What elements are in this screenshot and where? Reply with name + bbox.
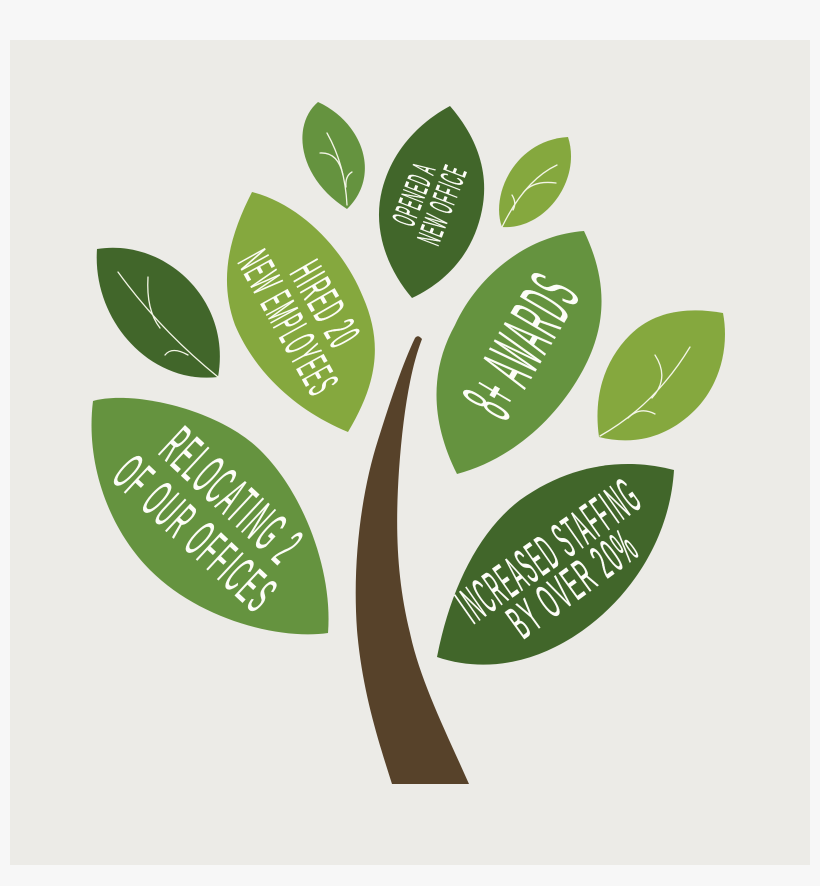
text: relocating 2 of our offices [102,416,315,624]
leaf: increased staffing by over 20% [437,464,674,665]
leaf veins [118,272,218,377]
leaf veins [320,133,352,205]
leaf veins [502,165,557,227]
leaf: opened a new office: OPENED A [385,157,442,231]
leaf: hired 20 new employees [227,192,375,432]
leaf: opened a new office: NEW OFFICE [410,160,474,250]
tree trunk [356,336,469,784]
infographic canvas: OF OUR OFFICES [102,445,288,624]
infographic canvas: RELOCATING 2 [148,416,315,577]
leaf veins [600,347,690,436]
leaf: right light green [597,310,725,440]
infographic canvas: NEW EMPLOYEES [228,242,349,404]
text: hired 20 new employees: HIRED 20 [280,252,371,357]
leaf: dark plain leaf [97,248,220,378]
leaf: small light green [499,137,571,227]
text: hired 20 new employees [228,242,371,404]
text: increased staffing by over 20% [447,467,651,649]
leaf: small mid green [302,102,365,209]
leaf: relocating offices [92,398,329,634]
leaf: opened a new office [379,106,484,298]
text: opened a new office [385,157,474,250]
leaf: 8+ awards [436,231,602,474]
